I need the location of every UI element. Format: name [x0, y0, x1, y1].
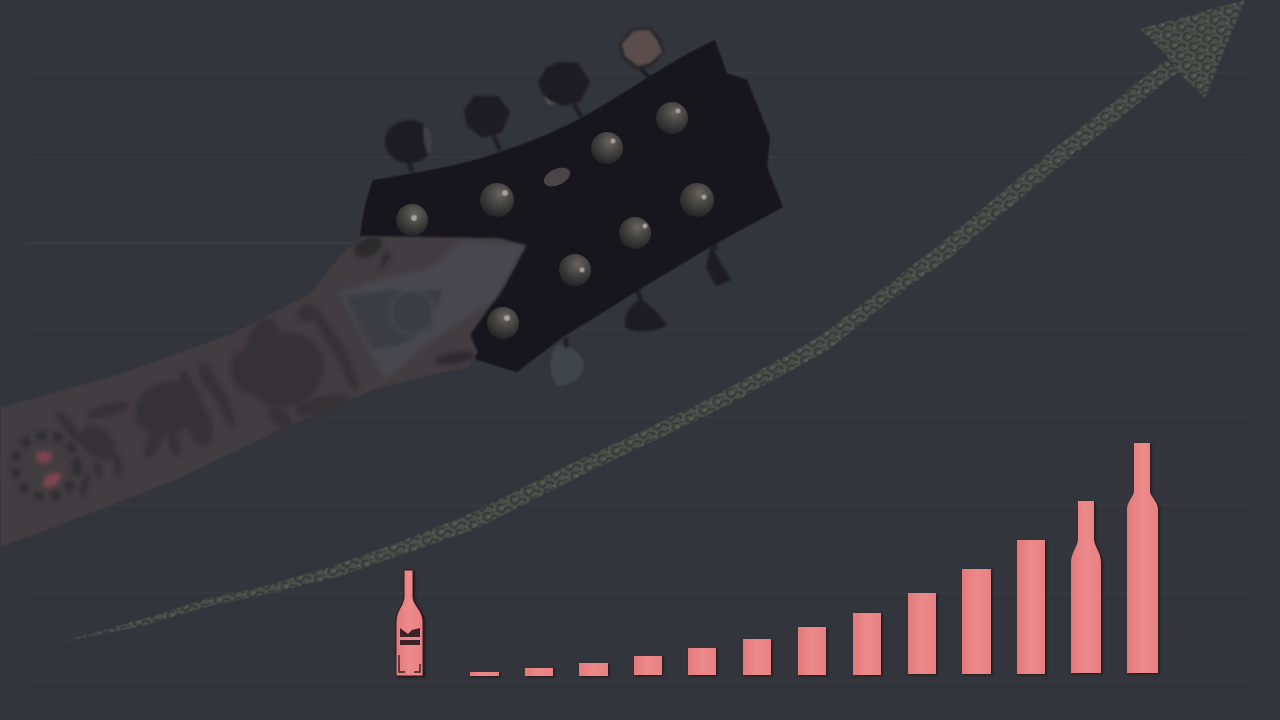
- hand and arm: [0, 236, 526, 547]
- side fern: [52, 408, 124, 500]
- arrow shaft: [60, 60, 1178, 642]
- bar to bottle 12: [1071, 501, 1101, 673]
- band tattoo: [296, 304, 360, 392]
- tuner keys: [385, 27, 731, 386]
- fern leaves: [176, 360, 238, 429]
- bars: [470, 540, 1045, 676]
- bottle chart: [396, 443, 1158, 676]
- floral wreath: [15, 435, 77, 497]
- arrow head: [1140, 0, 1245, 98]
- centre flower: [85, 372, 217, 461]
- guitar headstock group: [0, 27, 783, 547]
- large flower: [226, 313, 351, 433]
- hand tattoo: [338, 233, 525, 380]
- headstock body: [360, 40, 783, 372]
- labelled bottle: [396, 570, 423, 676]
- arm tattoos: [15, 304, 360, 500]
- bar to bottle 13: [1127, 443, 1158, 673]
- pegs: [396, 102, 714, 339]
